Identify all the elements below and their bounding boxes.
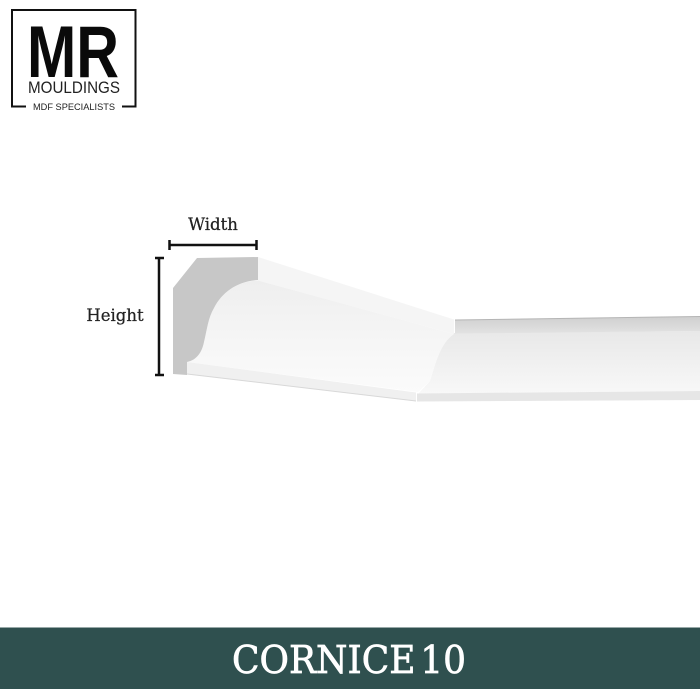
cove face bbox=[187, 280, 454, 392]
logo: MR Mouldings: MOULDINGS bbox=[28, 79, 120, 97]
cut end profile bbox=[173, 257, 258, 375]
cornice moulding illustration bbox=[173, 257, 700, 402]
lower lip bbox=[187, 362, 416, 401]
title banner: CORNICE 10 bbox=[232, 638, 466, 682]
upper fascia bbox=[258, 257, 454, 334]
moulding run to the right bbox=[417, 316, 700, 402]
height dimension: Height bbox=[86, 306, 144, 325]
width dimension bbox=[170, 215, 256, 250]
title banner bbox=[0, 628, 700, 689]
logo: MR Mouldings: MDF SPECIALISTS bbox=[33, 102, 115, 112]
logo: MR Mouldings bbox=[12, 10, 136, 112]
height dimension bbox=[86, 258, 164, 375]
logo: MR Mouldings: MR bbox=[27, 12, 119, 93]
width dimension: Width bbox=[188, 215, 238, 234]
